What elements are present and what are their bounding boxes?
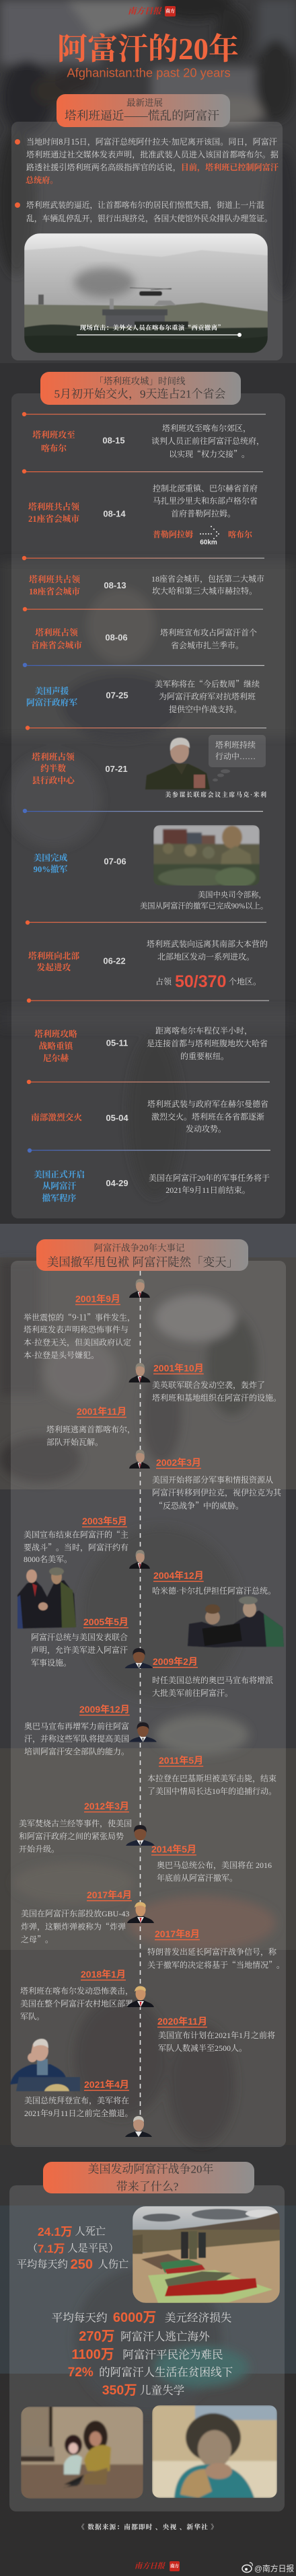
heading pill: what did it bring — [43, 2162, 254, 2193]
event 2011-05 — [147, 1755, 276, 1796]
event 2021-04: 2021年9月11日之前完全撤退。 — [24, 2108, 133, 2118]
bullet paragraph one: 路透社援引塔利班两名高级指挥官的话说，目前，塔利班已控制阿富汗 — [26, 162, 279, 172]
row 07-21: 塔利班占领 — [32, 752, 75, 762]
event 2014-05 — [151, 1844, 272, 1883]
event 2021-04 — [24, 2079, 133, 2118]
row 06-22: 占领 — [155, 976, 172, 986]
bullet paragraph two: 塔利班武装的逼近，让首都喀布尔的居民们惊慌失措，街道上一片混 — [26, 200, 264, 210]
event 2018-01: 美国在整个阿富汗农村地区部署 — [20, 1998, 133, 2008]
stats: economic and humanitarian: 350万 儿童失学 — [102, 2383, 184, 2398]
row 04-29: 撤军程序 — [42, 1193, 77, 1203]
row 08-06: 首座省会城市 — [31, 640, 82, 650]
event 2011-05: 2011年5月 — [159, 1755, 203, 1766]
row 06-22: 北部地区发动一系列进攻。 — [157, 951, 254, 962]
event 2002-03: 美国开始将部分军事和情报资源从 — [152, 1475, 273, 1485]
row 08-13: 08-13 — [104, 580, 126, 590]
row 04-29: 从阿富汗 — [42, 1181, 77, 1191]
row 08-06: 省会城市扎兰季市。 — [171, 640, 244, 650]
bottom logo: 南方 — [170, 2563, 179, 2569]
event 2017-08: 特朗普发出延长阿富汗战争信号，称 — [147, 1947, 277, 1957]
row 08-15 — [32, 423, 264, 460]
photo: US troops withdrawing — [153, 825, 260, 888]
event 2020-11: 美国宣布计划在2021年1月之前将 — [158, 2030, 275, 2040]
event 2012-03: 开始升级。 — [19, 1844, 59, 1854]
event 2021-04: 2021年4月 — [84, 2079, 129, 2090]
portrait: Bush 2003 — [129, 1550, 150, 1569]
event 2001-09: 2001年9月 — [75, 1294, 120, 1304]
row 06-22: 50/370 — [175, 972, 226, 991]
row 08-15: 08-15 — [102, 436, 125, 445]
photo caption: 现场直击：美外交人员在喀布尔重演“西贡撤离” — [80, 323, 224, 332]
stats: casualties: 平均每天约 250 人伤亡 — [17, 2257, 128, 2272]
event 2012-03: 美军焚烧古兰经等事件，使美国 — [19, 1818, 132, 1828]
bullet paragraph two — [15, 200, 272, 223]
event 2012-03: 和阿富汗政府之间的紧张局势 — [19, 1831, 124, 1841]
event 2001-09 — [24, 1294, 135, 1360]
panel: 20 years of war chronicle — [10, 1239, 286, 2147]
row 08-14: 08-14 — [103, 508, 126, 519]
photo: bodies under cloth — [133, 2206, 280, 2303]
row 08-13 — [29, 574, 264, 596]
event 2011-05: 本拉登在巴基斯坦被美军击毙，结束 — [147, 1773, 276, 1783]
panel: Taliban offensive timeline — [11, 372, 285, 1218]
event 2017-04: 美国在阿富汗东部投放GBU-43 — [21, 1908, 129, 1918]
portrait: Bush 2002 — [129, 1450, 150, 1469]
data source: 《 数据来源：南都即时 、央视 、新华社 》 — [78, 2523, 218, 2531]
row 08-15: 谈判人员正前往阿富汗总统府， — [151, 436, 264, 446]
bullet paragraph one: 塔利班通过社交媒体发表声明，批准武装人员进入该国首都喀布尔。据 — [26, 149, 279, 159]
heading pill: what did it bring: 带来了什么? — [116, 2180, 178, 2193]
row 05-11: 尼尔赫 — [43, 1053, 69, 1063]
stats: casualties: （7.1万 人是平民） — [28, 2242, 118, 2255]
row 04-29: 美国正式开启 — [34, 1169, 85, 1179]
stats: economic and humanitarian: 1100万 阿富汗平民沦为难民 — [71, 2347, 223, 2362]
event 2001-09: 举世震惊的“9·11”事件发生， — [24, 1311, 135, 1323]
row 04-29: 2021年9月11日前结束。 — [165, 1185, 250, 1195]
row 07-06: 90%撤军 — [34, 864, 68, 874]
event 2003-05: 要战斗”。当时，阿富汗约有 — [24, 1541, 128, 1553]
speech bubble: 塔利班持续 — [215, 740, 256, 750]
portrait: Bush 2001 — [129, 1279, 150, 1298]
route: Pul-e-Alam to Kabul 60km: 喀布尔 — [228, 529, 253, 539]
event 2003-05: 美国宣布结束在阿富汗的“主 — [24, 1529, 128, 1540]
event 2017-04 — [21, 1889, 132, 1945]
bullet paragraph one: 当地时间8月15日，阿富汗总统阿什拉夫·加尼离开该国。同日，阿富汗 — [26, 136, 277, 147]
portrait: Biden 2021 — [125, 2116, 152, 2137]
event 2005-05 — [31, 1616, 128, 1668]
heading pill: offensive timeline: 「塔利班攻城」时间线 — [94, 375, 186, 386]
heading pill: offensive timeline — [40, 372, 241, 405]
event 2009-02: 2009年2月 — [153, 1656, 198, 1667]
event 2002-03: 阿富汗转移到伊拉克，视伊拉克为其 — [152, 1487, 282, 1497]
event 2002-03: “反恐战争”中的威胁。 — [155, 1499, 244, 1512]
row 07-06: 美国从阿富汗的撤军已完成90%以上。 — [140, 901, 268, 910]
subtitle: Afghanistan:the past 20 years — [67, 66, 231, 79]
top logo: 南方 — [165, 8, 175, 13]
top logo: 南方日报 — [128, 7, 162, 16]
event 2001-11: 2001年11月 — [77, 1406, 126, 1417]
panel: latest progress — [11, 94, 283, 360]
heading pill: chronicle: 阿富汗战争20年大事记 — [94, 1243, 184, 1253]
event 2012-03 — [19, 1801, 132, 1854]
photo: Biden at podium — [10, 2039, 80, 2091]
row 07-21: 县行政中心 — [32, 775, 76, 785]
bottom logo — [135, 2561, 180, 2571]
photo: two children by stone wall — [21, 2407, 143, 2499]
event 2017-04: 2017年4月 — [87, 1889, 132, 1900]
event 2004-12: 哈米德·卡尔扎伊担任阿富汗总统。 — [152, 1586, 276, 1596]
event 2005-05: 军事设施。 — [31, 1657, 71, 1668]
event 2001-10: 塔利班和基地组织在阿富汗的设施。 — [152, 1393, 281, 1403]
row 08-13: 坎大哈和第三大城市赫拉特。 — [152, 586, 257, 596]
row 07-06: 美国完成 — [34, 853, 68, 863]
panel: cost of the war — [9, 2162, 285, 2511]
bullet paragraph two: 乱，车辆乱停乱开，银行出现挤兑，各国大使馆外民众排队办理签证。 — [26, 214, 272, 223]
row 04-29 — [34, 1169, 270, 1203]
row 06-22: 06-22 — [103, 956, 126, 966]
event 2003-05 — [24, 1516, 128, 1564]
row 08-15: 塔利班攻至喀布尔郊区， — [162, 423, 251, 433]
row 08-06: 塔利班宣布攻占阿富汗首个 — [160, 627, 257, 637]
row 06-22: 塔利班向北部 — [28, 951, 79, 961]
row 08-15: 喀布尔 — [41, 443, 67, 453]
stats: economic and humanitarian: 270万 阿富汗人逃亡海外 — [79, 2329, 210, 2344]
photo: child portrait — [152, 2405, 277, 2498]
event 2005-05: 阿富汗总统与美国发表联合 — [31, 1632, 128, 1642]
event 2009-12: 汗，并称这些军队将提高美国 — [24, 1733, 129, 1744]
row 07-25: 07-25 — [106, 690, 128, 701]
event 2001-10 — [152, 1362, 281, 1403]
speech bubble — [209, 735, 266, 781]
event 2004-12 — [152, 1570, 276, 1596]
stats: casualties — [17, 2225, 128, 2272]
row 05-11: 距离喀布尔车程仅半小时， — [155, 1025, 252, 1036]
row 08-14: 塔利班共占领 — [28, 502, 80, 512]
event 2014-05: 2014年5月 — [151, 1844, 196, 1855]
event 2002-03: 2002年3月 — [156, 1457, 201, 1468]
row 05-11: 是连接首都与塔利班腹地坎大哈省 — [147, 1038, 268, 1048]
event 2001-11: 部队开始瓦解。 — [46, 1437, 103, 1447]
row 08-06 — [31, 627, 257, 650]
row 07-25: 为阿富汗政府军对抗塔利班 — [159, 691, 256, 701]
event 2001-09: 塔利班发表声明称恐怖事件与 — [24, 1325, 128, 1334]
photo: Bush and Karzai handshake — [17, 1567, 76, 1629]
event 2001-09: 本·拉登无关，但美国政府认定 — [24, 1337, 131, 1348]
portrait: Obama 2014 — [126, 1825, 155, 1846]
route: Pul-e-Alam to Kabul 60km: 普勒阿拉姆 — [153, 529, 193, 539]
weibo watermark: @南方日报 — [254, 2564, 294, 2573]
row 05-04 — [31, 1099, 268, 1134]
row 08-13: 18座省会城市，包括第二大城市 — [151, 574, 264, 584]
heading pill: what did it bring: 美国发动阿富汗战争20年 — [87, 2162, 214, 2176]
row 08-13: 18座省会城市 — [29, 586, 80, 596]
row 08-14: 马扎里沙里夫和东部卢格尔省 — [153, 496, 258, 506]
row 07-06: 美国中央司令部称， — [198, 890, 266, 900]
event 2018-01 — [20, 1969, 133, 2021]
stats: economic and humanitarian — [52, 2310, 233, 2398]
event 2020-11 — [157, 2016, 275, 2053]
row 05-04: 发动攻势。 — [186, 1124, 226, 1134]
heading pill: latest progress — [57, 94, 230, 127]
event 2009-02 — [152, 1656, 273, 1698]
event 2014-05: 年底前从阿富汗撤军。 — [157, 1873, 237, 1883]
event 2009-12: 2009年12月 — [79, 1704, 130, 1715]
event 2009-12 — [24, 1704, 130, 1756]
event 2018-01: 2018年1月 — [81, 1969, 126, 1980]
event 2009-02: 大批美军前往阿富汗。 — [152, 1688, 233, 1698]
event 2005-05: 声明，允许美军进入阿富汗 — [31, 1645, 128, 1655]
row 08-14: 控制北部重镇、巴尔赫省首府 — [153, 483, 258, 494]
heading pill: chronicle: 美国撤军甩包袱 阿富汗陡然「变天」 — [47, 1255, 238, 1269]
portrait: Trump 2018 — [127, 1986, 154, 2007]
event 2014-05: 奥巴马总统公布，美国将在 2016 — [157, 1860, 272, 1870]
title: 阿富汗的20年 — [57, 32, 239, 66]
route: Pul-e-Alam to Kabul 60km: 60km — [200, 539, 217, 546]
event 2001-09: 本·拉登是头号嫌犯。 — [24, 1350, 99, 1360]
row 08-15: 以实现“权力交接”。 — [169, 448, 250, 460]
event 2017-08 — [147, 1928, 285, 1970]
row 04-29: 美国在阿富汗20年的军事任务将于 — [149, 1173, 270, 1183]
row 08-14 — [28, 483, 258, 546]
event 2001-10: 美英联军联合发动空袭，轰炸了 — [152, 1380, 265, 1390]
dashed timeline axis — [140, 1271, 141, 2118]
event 2017-08: 2017年8月 — [155, 1928, 200, 1939]
heading pill: offensive timeline: 5月初开始交火，9天连占21个省会 — [54, 387, 226, 401]
bullet paragraph one: 总统府。 — [26, 175, 58, 185]
event 2011-05: 了美国中情局长达10年的追捕行动。 — [147, 1786, 276, 1796]
event 2017-08: 关于撤军的决定将基于“当地情况”。 — [147, 1959, 285, 1970]
heading pill: chronicle — [36, 1239, 248, 1271]
event 2017-04: 炸弹，这颗炸弹被称为“炸弹 — [21, 1920, 126, 1933]
event 2004-12: 2004年12月 — [153, 1570, 204, 1581]
photo: Karzai and predecessor — [188, 1596, 284, 1647]
event 2021-04: 美国总统拜登宣布，美军将在 — [24, 2095, 129, 2105]
event 2020-11: 2020年11月 — [157, 2016, 207, 2027]
row 05-11: 战略重镇 — [39, 1041, 75, 1051]
stats: economic and humanitarian: 72% 的阿富汗人生活在贫困线下 — [68, 2366, 233, 2379]
row 07-21: 约半数 — [40, 763, 66, 773]
row 05-11: 塔利班攻略 — [34, 1029, 77, 1039]
row 05-11 — [34, 1025, 268, 1063]
row 04-29: 04-29 — [106, 1178, 128, 1188]
bullet paragraph one — [15, 136, 279, 185]
event 2001-10: 2001年10月 — [153, 1362, 204, 1373]
row 08-13: 塔利班共占领 — [29, 574, 81, 584]
row 05-11: 的重要枢纽。 — [180, 1051, 229, 1061]
row 05-11: 05-11 — [106, 1038, 128, 1048]
portrait: Obama 2009-12 — [129, 1722, 157, 1742]
event 2009-02: 时任美国总统的奥巴马宣布将增派 — [152, 1675, 273, 1685]
weibo watermark — [242, 2563, 294, 2573]
event 2012-03: 2012年3月 — [84, 1801, 129, 1811]
portrait: Mark Milley — [145, 738, 210, 789]
row 08-06: 08-06 — [105, 632, 128, 643]
row 07-06: 07-06 — [104, 857, 126, 866]
photo: helicopter over Kabul embassy — [24, 233, 268, 353]
row 06-22 — [28, 939, 268, 991]
row 05-04: 南部激烈交火 — [31, 1112, 82, 1122]
portrait: Bush 2001-10 — [129, 1363, 151, 1382]
speech bubble: 行动中…… — [215, 751, 256, 761]
row 06-22: 塔利班武装向远离其南部大本营的 — [147, 939, 268, 949]
portrait: Obama 2009 — [125, 1648, 153, 1668]
event 2001-11: 塔利班逃离首都喀布尔， — [46, 1424, 135, 1434]
stats: casualties: 24.1万 人死亡 — [38, 2225, 106, 2238]
event 2009-12: 培训阿富汗安全部队的能力。 — [24, 1746, 129, 1756]
row 07-25: 阿富汗政府军 — [26, 697, 77, 707]
row 07-25: 提供空中作战支持。 — [169, 704, 242, 714]
event 2020-11: 军队人数减半至2500人。 — [158, 2043, 247, 2053]
row 05-04: 激烈交火。塔利班在各省都逐渐 — [151, 1111, 264, 1122]
event 2017-04: 之母”。 — [21, 1934, 53, 1945]
heading pill: latest progress: 最新进展 — [126, 98, 163, 108]
row 07-25 — [26, 678, 260, 714]
row 07-21 — [32, 735, 268, 798]
row 07-25: 美国声援 — [35, 686, 69, 696]
row 07-21: 07-21 — [105, 764, 128, 774]
portrait caption: 美参谋长联席会议主席马克·米利 — [165, 791, 268, 798]
row 07-25: 美军称将在“今后数周”继续 — [155, 678, 260, 690]
event 2003-05: 8000名美军。 — [24, 1555, 72, 1564]
event 2018-01: 塔利班在喀布尔发动恐怖袭击， — [20, 1986, 133, 1996]
event 2009-12: 奥巴马宣布再增军力前往阿富 — [24, 1721, 129, 1731]
route: Pul-e-Alam to Kabul 60km — [153, 526, 253, 546]
event 2002-03 — [152, 1457, 282, 1512]
event 2003-05: 2003年5月 — [82, 1516, 127, 1526]
stats: economic and humanitarian: 平均每天约 6000万 美元经济损失 — [52, 2310, 232, 2325]
event 2018-01: 军队。 — [20, 2012, 44, 2021]
row 08-15: 塔利班攻至 — [32, 430, 75, 440]
dividers — [22, 412, 270, 1153]
row 08-14: 21座省会城市 — [28, 514, 79, 524]
event 2001-11 — [46, 1406, 135, 1447]
top logo — [128, 6, 176, 16]
row 05-04: 塔利班武装与政府军在赫尔曼德省 — [147, 1099, 268, 1109]
row 07-06 — [34, 825, 268, 910]
heading pill: latest progress: 塔利班逼近——慌乱的阿富汗 — [65, 108, 219, 122]
portrait: Trump 2017 — [127, 1902, 154, 1923]
event 2005-05: 2005年5月 — [83, 1616, 128, 1627]
row 06-22: 个地区。 — [229, 976, 261, 986]
row 05-04: 05-04 — [106, 1113, 128, 1123]
row 06-22: 发起进攻 — [37, 962, 71, 972]
bottom logo: 南方日报 — [135, 2562, 166, 2570]
row 08-14: 首府普勒阿拉姆。 — [171, 508, 235, 518]
row 08-06: 塔利班占领 — [35, 627, 79, 637]
